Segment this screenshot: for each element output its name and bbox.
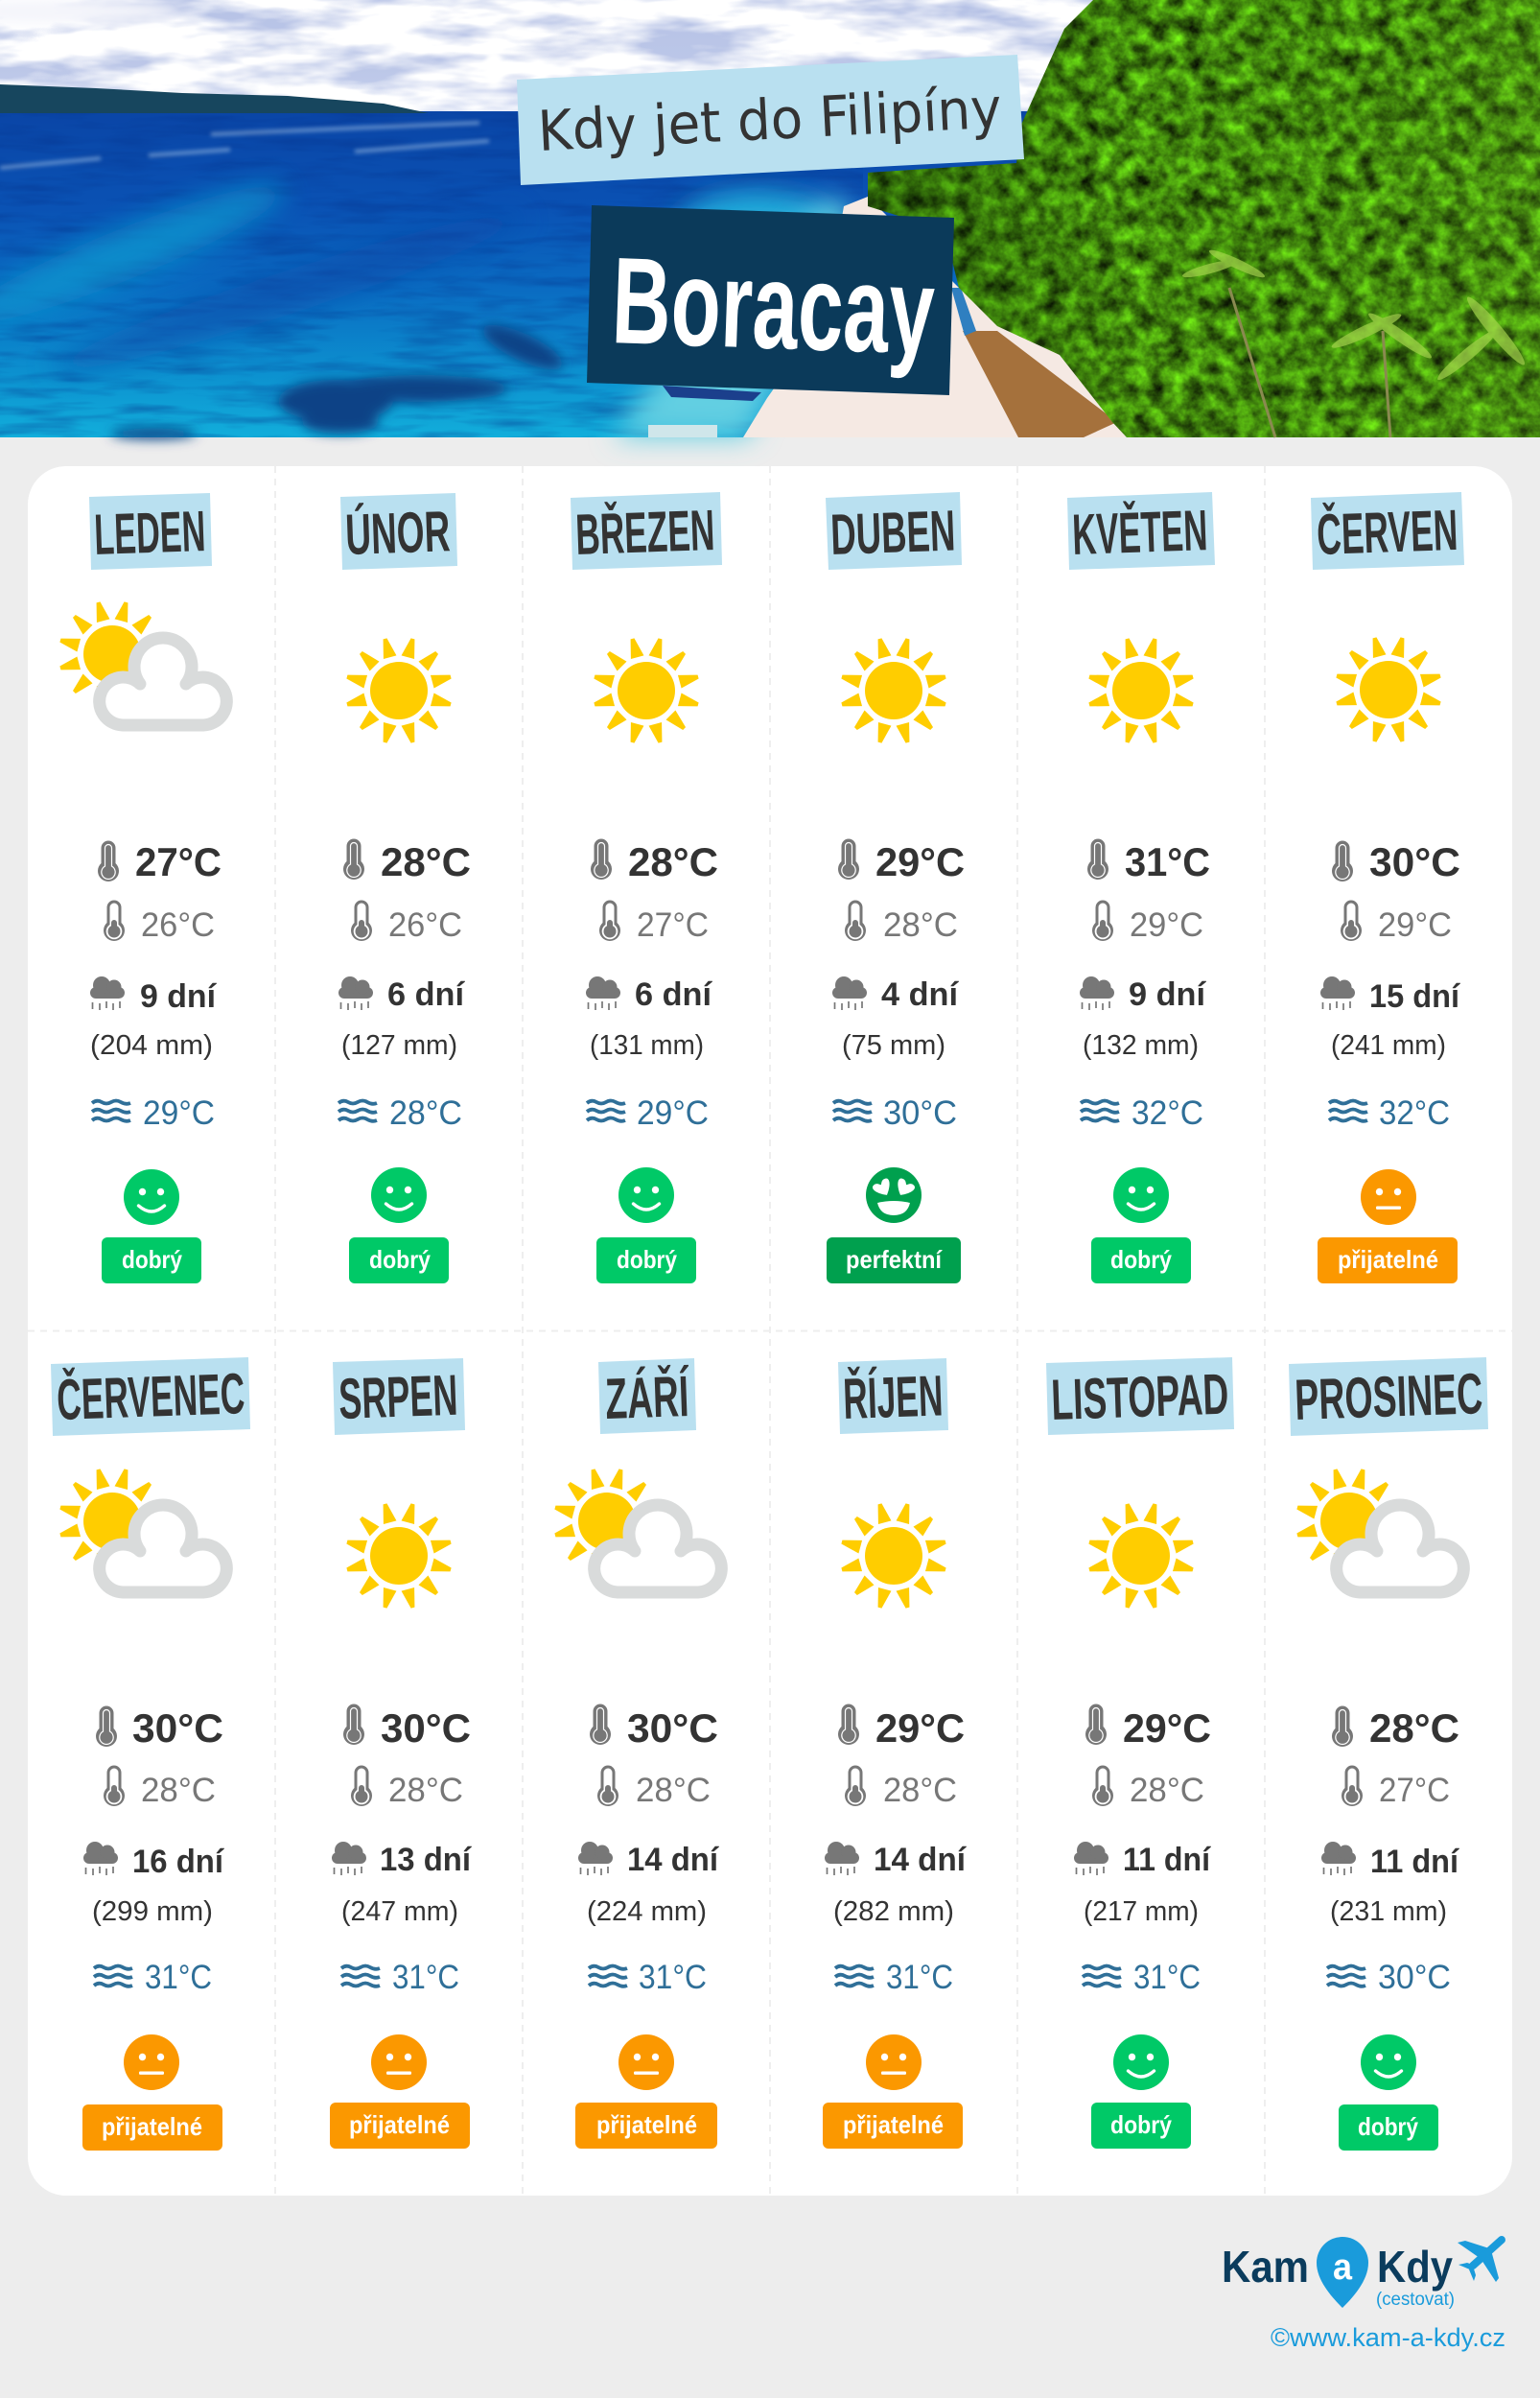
- month label: [1067, 492, 1215, 570]
- panel: Červenec: [51, 1357, 250, 2151]
- rainy days: 9 dní: [1129, 976, 1207, 1013]
- rating: perfektní: perfektní: [846, 1245, 943, 1274]
- month label: [333, 1358, 465, 1435]
- sea temperature: [92, 1094, 215, 1132]
- minimum temperature: [1342, 1765, 1450, 1809]
- rainfall: (131 mm): [590, 1030, 704, 1061]
- month label: SRPEN: [338, 1363, 458, 1431]
- minimum temperature: [845, 900, 958, 944]
- maximum temperature: 29°C: [875, 839, 965, 884]
- rainfall: (132 mm): [1083, 1030, 1199, 1061]
- maximum temperature: [343, 1704, 471, 1751]
- panel: Duben: [826, 492, 965, 1283]
- minimum temperature: [845, 1765, 957, 1809]
- rainy days: 13 dní: [380, 1842, 473, 1878]
- sea temperature: [833, 1094, 957, 1132]
- sea temperature: [589, 1959, 707, 1996]
- icon: sun and cloud: [553, 1468, 721, 1592]
- month label: [598, 1358, 696, 1434]
- sea temperature: [1327, 1959, 1451, 1996]
- icon: sun: [1087, 1502, 1195, 1610]
- maximum temperature: [98, 839, 222, 884]
- icon: airplane: [1458, 2240, 1502, 2282]
- minimum temperature: 29°C: [1130, 906, 1203, 944]
- logo: Kam a Kdy: Kdy: [1377, 2242, 1453, 2292]
- rainy days: [825, 1842, 968, 1878]
- sea temperature: [1329, 1094, 1450, 1132]
- panel: Říjen: [823, 1358, 968, 2149]
- panel: Květen: [1067, 492, 1215, 1283]
- logo: Kam a Kdy: [1222, 2237, 1502, 2310]
- rainfall: (231 mm): [1330, 1896, 1447, 1927]
- icon: sun: [345, 637, 453, 744]
- rainy days: [1074, 1842, 1211, 1878]
- panel: Prosinec: [1289, 1357, 1488, 2151]
- month label: [340, 493, 457, 570]
- minimum temperature: 28°C: [388, 1772, 463, 1809]
- month label: ZÁŘÍ: [604, 1364, 690, 1431]
- sea temperature: [94, 1959, 212, 1996]
- header photo: Boracay coast: [0, 0, 1540, 439]
- rainy days: [578, 1842, 720, 1878]
- minimum temperature: 28°C: [636, 1772, 711, 1809]
- rainfall: (282 mm): [833, 1896, 954, 1927]
- rainfall: (241 mm): [1331, 1030, 1446, 1061]
- icon: sun: [1087, 637, 1195, 744]
- maximum temperature: 28°C: [628, 839, 718, 884]
- rainy days: [338, 976, 466, 1013]
- rainy days: [1080, 976, 1207, 1013]
- sea temperature: [835, 1959, 953, 1996]
- minimum temperature: [1341, 900, 1452, 944]
- rainfall: (204 mm): [90, 1030, 213, 1061]
- rating: dobrý: [1091, 1167, 1191, 1283]
- rainy days: [1321, 1842, 1459, 1880]
- rating: přijatelné: [575, 2034, 717, 2149]
- month label: DUBEN: [829, 498, 956, 567]
- maximum temperature: 30°C: [132, 1705, 223, 1751]
- icon: sun: [345, 1502, 453, 1610]
- month label: KVĚTEN: [1071, 498, 1208, 567]
- sea temperature: [341, 1959, 459, 1996]
- rating: přijatelné: [823, 2034, 963, 2149]
- rating: dobrý: dobrý: [617, 1245, 677, 1274]
- minimum temperature: [1092, 900, 1203, 944]
- icon: sun: [593, 637, 700, 744]
- maximum temperature: 27°C: [135, 839, 222, 884]
- sea temperature: 30°C: [883, 1094, 957, 1132]
- rainy days: [832, 976, 960, 1013]
- rainfall: (127 mm): [341, 1030, 457, 1061]
- maximum temperature: 28°C: [381, 839, 471, 884]
- minimum temperature: [104, 1765, 216, 1809]
- sea temperature: 29°C: [143, 1094, 215, 1132]
- sea temperature: 31°C: [392, 1959, 459, 1996]
- rating: přijatelné: [82, 2034, 222, 2151]
- rainfall: (75 mm): [842, 1030, 945, 1061]
- logo: Kam a Kdy: (cestovat): [1376, 2290, 1455, 2310]
- icon: sun: [840, 637, 947, 744]
- month label: [571, 492, 722, 570]
- minimum temperature: [351, 900, 462, 944]
- sea temperature: 31°C: [1133, 1959, 1201, 1996]
- maximum temperature: 29°C: [875, 1705, 965, 1751]
- maximum temperature: [343, 838, 471, 884]
- rating: přijatelné: [330, 2034, 470, 2149]
- minimum temperature: [1092, 1765, 1204, 1809]
- month label: [89, 493, 212, 570]
- rainfall: (224 mm): [587, 1896, 707, 1927]
- rating: dobrý: [102, 1169, 201, 1283]
- panel: Září: [553, 1358, 721, 2149]
- rating: dobrý: [349, 1167, 449, 1283]
- rating: dobrý: dobrý: [1358, 2112, 1418, 2141]
- logo: Kam a Kdy: Kam: [1222, 2242, 1309, 2292]
- rainy days: [1320, 976, 1460, 1015]
- title band: Kdy jet do Filipíny: [517, 55, 1024, 185]
- rainy days: 11 dní: [1123, 1842, 1211, 1878]
- minimum temperature: 28°C: [141, 1772, 216, 1809]
- title band: Boracay: [587, 205, 954, 395]
- panel: Listopad: [1046, 1357, 1234, 2149]
- maximum temperature: [1085, 1704, 1211, 1751]
- sea temperature: 32°C: [1132, 1094, 1203, 1132]
- rating: dobrý: [1091, 2034, 1191, 2149]
- sea temperature: 31°C: [886, 1959, 953, 1996]
- minimum temperature: 28°C: [883, 1772, 957, 1809]
- rainy days: [90, 976, 218, 1015]
- sea temperature: [1083, 1959, 1201, 1996]
- icon: sun and cloud: [1295, 1468, 1463, 1592]
- minimum temperature: 27°C: [637, 906, 709, 944]
- rating: přijatelné: přijatelné: [349, 2110, 450, 2139]
- sea temperature: [1081, 1094, 1203, 1132]
- rainy days: [332, 1842, 473, 1878]
- icon: map pin: [1317, 2237, 1368, 2308]
- rainy days: [83, 1842, 225, 1880]
- panel: Leden: [58, 493, 226, 1283]
- maximum temperature: 28°C: [1369, 1705, 1459, 1751]
- month label: LEDEN: [93, 499, 206, 567]
- website credit: ©www.kam-a-kdy.cz: [1271, 2323, 1505, 2352]
- minimum temperature: 27°C: [1379, 1772, 1450, 1809]
- sea temperature: [338, 1094, 462, 1132]
- maximum temperature: 30°C: [1369, 839, 1460, 884]
- panel: calendar card: [28, 466, 1512, 2196]
- sea temperature: 31°C: [639, 1959, 707, 1996]
- minimum temperature: 28°C: [1130, 1772, 1204, 1809]
- rating: dobrý: dobrý: [1110, 1245, 1172, 1274]
- rainy days: 15 dní: [1369, 978, 1460, 1015]
- rainfall: (217 mm): [1084, 1896, 1199, 1927]
- sea temperature: [587, 1094, 709, 1132]
- rainy days: 9 dní: [140, 978, 218, 1015]
- rating: přijatelné: přijatelné: [1338, 1245, 1438, 1274]
- icon: sun and cloud: [58, 600, 226, 725]
- month label: [1046, 1357, 1234, 1435]
- rainy days: 6 dní: [387, 976, 466, 1013]
- minimum temperature: [597, 1765, 711, 1809]
- minimum temperature: 29°C: [1378, 906, 1452, 944]
- maximum temperature: [590, 1704, 718, 1751]
- maximum temperature: [838, 1704, 965, 1751]
- panel: Srpen: [330, 1358, 473, 2149]
- month label: [51, 1357, 250, 1436]
- maximum temperature: [838, 838, 965, 884]
- rating: dobrý: dobrý: [1110, 2110, 1172, 2139]
- minimum temperature: 26°C: [388, 906, 462, 944]
- minimum temperature: [599, 900, 709, 944]
- rainy days: [586, 976, 713, 1013]
- icon: sun: [840, 1502, 947, 1610]
- minimum temperature: 26°C: [141, 906, 215, 944]
- panel: Únor: [338, 493, 471, 1283]
- icon: sun: [1335, 636, 1442, 743]
- rating: přijatelné: přijatelné: [596, 2110, 697, 2139]
- month label: LISTOPAD: [1050, 1362, 1229, 1432]
- month label: ŘÍJEN: [842, 1363, 944, 1431]
- month label: ÚNOR: [344, 499, 451, 567]
- minimum temperature: 28°C: [883, 906, 958, 944]
- rating: dobrý: [1339, 2034, 1438, 2151]
- sea temperature: 29°C: [637, 1094, 709, 1132]
- month label: [1311, 492, 1464, 570]
- month label: [826, 492, 962, 570]
- rainy days: 6 dní: [635, 976, 713, 1013]
- rating: dobrý: [596, 1167, 696, 1283]
- panel: Červen: [1311, 492, 1464, 1283]
- rainfall: (247 mm): [341, 1896, 458, 1927]
- icon: sun and cloud: [58, 1468, 226, 1592]
- rainy days: 11 dní: [1370, 1844, 1459, 1880]
- rainy days: 4 dní: [881, 976, 960, 1013]
- rating: perfektní: [827, 1167, 961, 1283]
- maximum temperature: [591, 838, 718, 884]
- maximum temperature: 29°C: [1123, 1705, 1211, 1751]
- rating: přijatelné: [1318, 1169, 1458, 1283]
- minimum temperature: [104, 900, 215, 944]
- rainy days: 14 dní: [874, 1842, 968, 1878]
- rainy days: 14 dní: [627, 1842, 720, 1878]
- rainy days: 16 dní: [132, 1844, 225, 1880]
- title band: Kdy jet do Filipíny: Kdy jet do Filipíny: [536, 76, 1003, 164]
- maximum temperature: 30°C: [627, 1705, 718, 1751]
- rating: přijatelné: přijatelné: [102, 2112, 202, 2141]
- sea temperature: 28°C: [389, 1094, 462, 1132]
- rainfall: (299 mm): [92, 1896, 213, 1927]
- logo: Kam a Kdy: a: [1333, 2247, 1353, 2288]
- sea temperature: 32°C: [1379, 1094, 1450, 1132]
- minimum temperature: [351, 1765, 463, 1809]
- maximum temperature: 30°C: [381, 1705, 471, 1751]
- title band: Boracay: Boracay: [610, 232, 937, 381]
- sea temperature: 31°C: [145, 1959, 212, 1996]
- month label: BŘEZEN: [574, 498, 715, 567]
- month label: [838, 1358, 948, 1434]
- panel: Březen: [571, 492, 722, 1283]
- rating: dobrý: dobrý: [369, 1245, 431, 1274]
- maximum temperature: 31°C: [1125, 839, 1210, 884]
- rating: přijatelné: přijatelné: [843, 2110, 944, 2139]
- maximum temperature: [1087, 838, 1210, 884]
- month label: ČERVENEC: [56, 1361, 245, 1432]
- rating: dobrý: dobrý: [122, 1245, 182, 1274]
- sea temperature: 30°C: [1378, 1959, 1451, 1996]
